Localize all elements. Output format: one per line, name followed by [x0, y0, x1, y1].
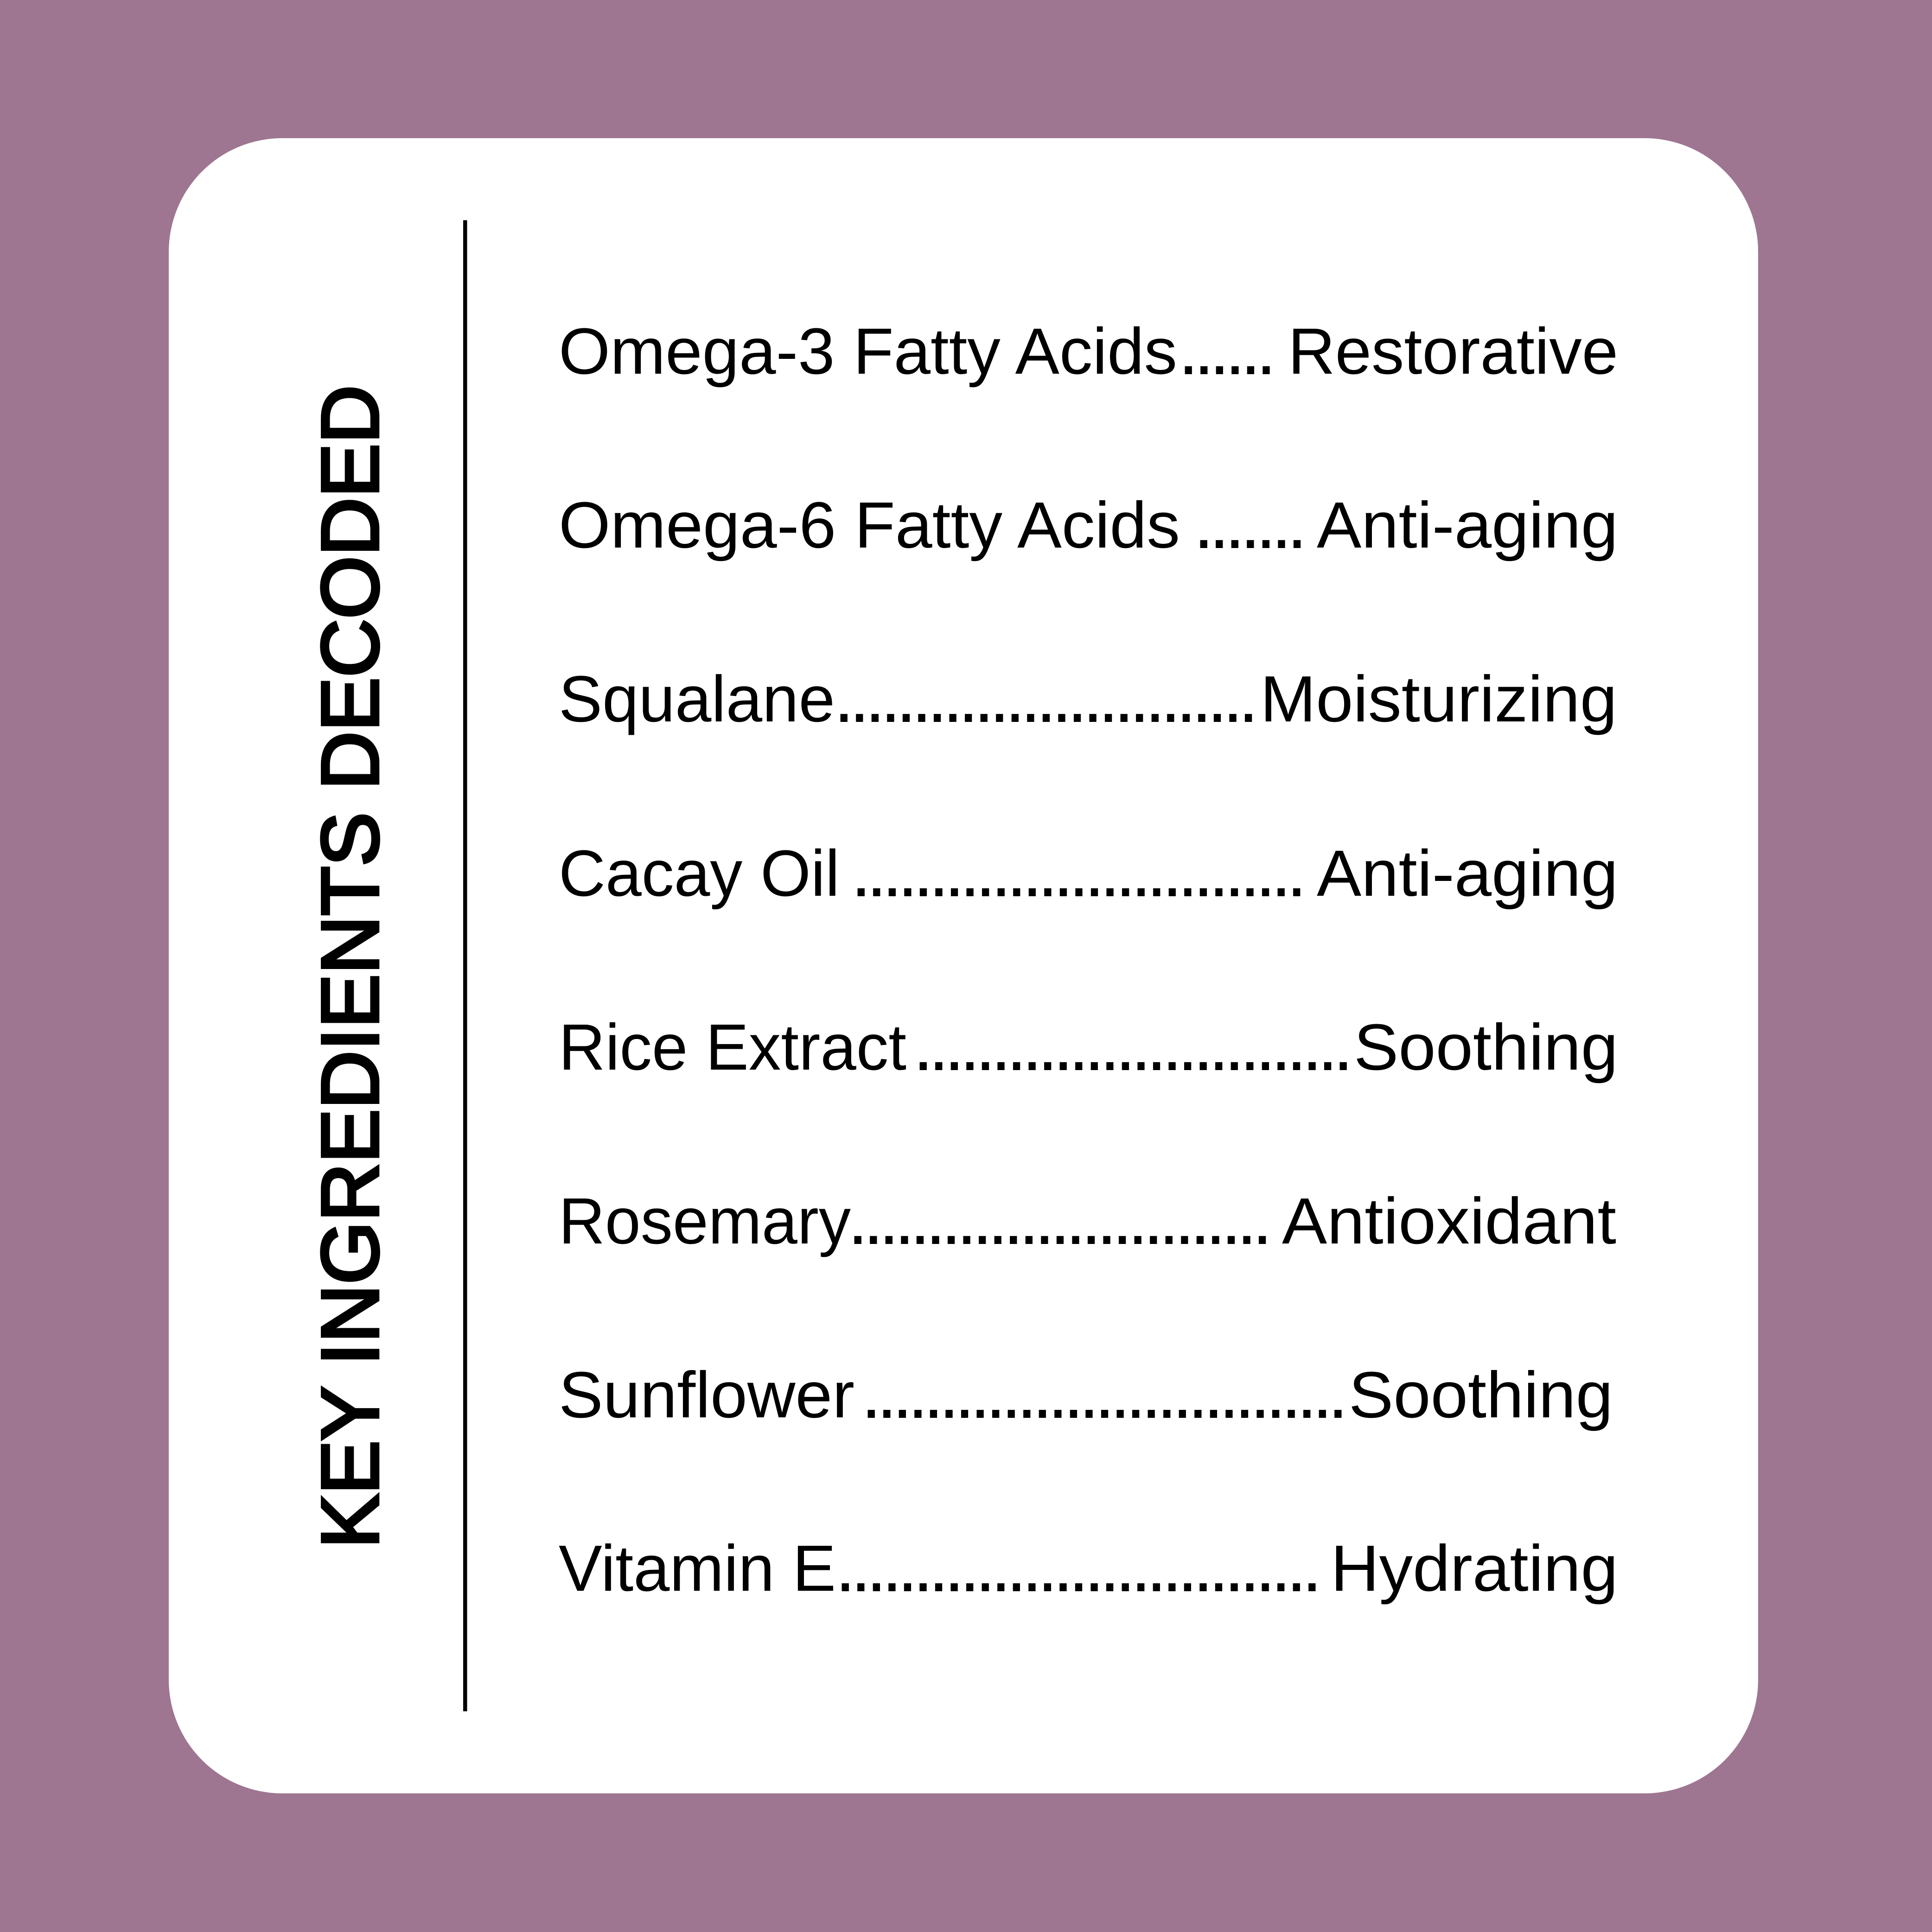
row: Sunflower: ...............................: [861, 1351, 1343, 1434]
row: Cacay Oil: [559, 829, 1618, 912]
row: Omega-3 Fatty Acids: Restorative: [1288, 314, 1618, 388]
row: Rice Extract: [559, 1003, 1618, 1086]
row: Vitamin E: ...............................: [835, 1524, 1317, 1607]
row: Cacay Oil: Cacay Oil: [559, 836, 840, 910]
row: Rice Extract: Rice Extract: [559, 1010, 906, 1084]
row: Rosemary: Rosemary: [559, 1184, 851, 1257]
row: Omega-6 Fatty Acids: [559, 481, 1618, 564]
row: Sunflower: Sunflower: [559, 1358, 854, 1431]
row: Omega-6 Fatty Acids: Omega-6 Fatty Acids: [559, 488, 1180, 561]
vertical divider: [463, 220, 467, 1711]
title: key ingredients decoded: KEY INGREDIENTS DECODED: [305, 385, 395, 1549]
row: Omega-6 Fatty Acids: Anti-aging: [1317, 488, 1618, 561]
panel: white card: [169, 138, 1758, 1793]
row: Rosemary: Antioxidant: [1282, 1184, 1616, 1257]
row: Squalane: ...........................: [834, 655, 1254, 738]
row: Omega-3 Fatty Acids: [559, 307, 1618, 390]
row: Squalane: [559, 655, 1617, 738]
row: Vitamin E: Hydrating: [1331, 1531, 1618, 1605]
row: Squalane: Moisturizing: [1260, 662, 1617, 735]
row: Vitamin E: [559, 1524, 1618, 1607]
row: Omega-3 Fatty Acids: Omega-3 Fatty Acids: [559, 314, 1177, 388]
row: Cacay Oil: Anti-aging: [1317, 836, 1618, 910]
row: Omega-6 Fatty Acids: .......: [1193, 481, 1302, 564]
row: Vitamin E: Vitamin E: [559, 1531, 836, 1605]
row: Cacay Oil: .............................: [851, 829, 1302, 912]
row: Sunflower: [559, 1351, 1613, 1434]
row: Omega-3 Fatty Acids: ......: [1178, 307, 1271, 390]
row: Rice Extract: ............................: [913, 1003, 1348, 1086]
row: Sunflower: Soothing: [1349, 1358, 1613, 1431]
row: Rice Extract: Soothing: [1354, 1010, 1618, 1084]
row: Rosemary: ...........................: [848, 1177, 1268, 1260]
row: Rosemary: [559, 1177, 1616, 1260]
row: Squalane: Squalane: [559, 662, 835, 735]
